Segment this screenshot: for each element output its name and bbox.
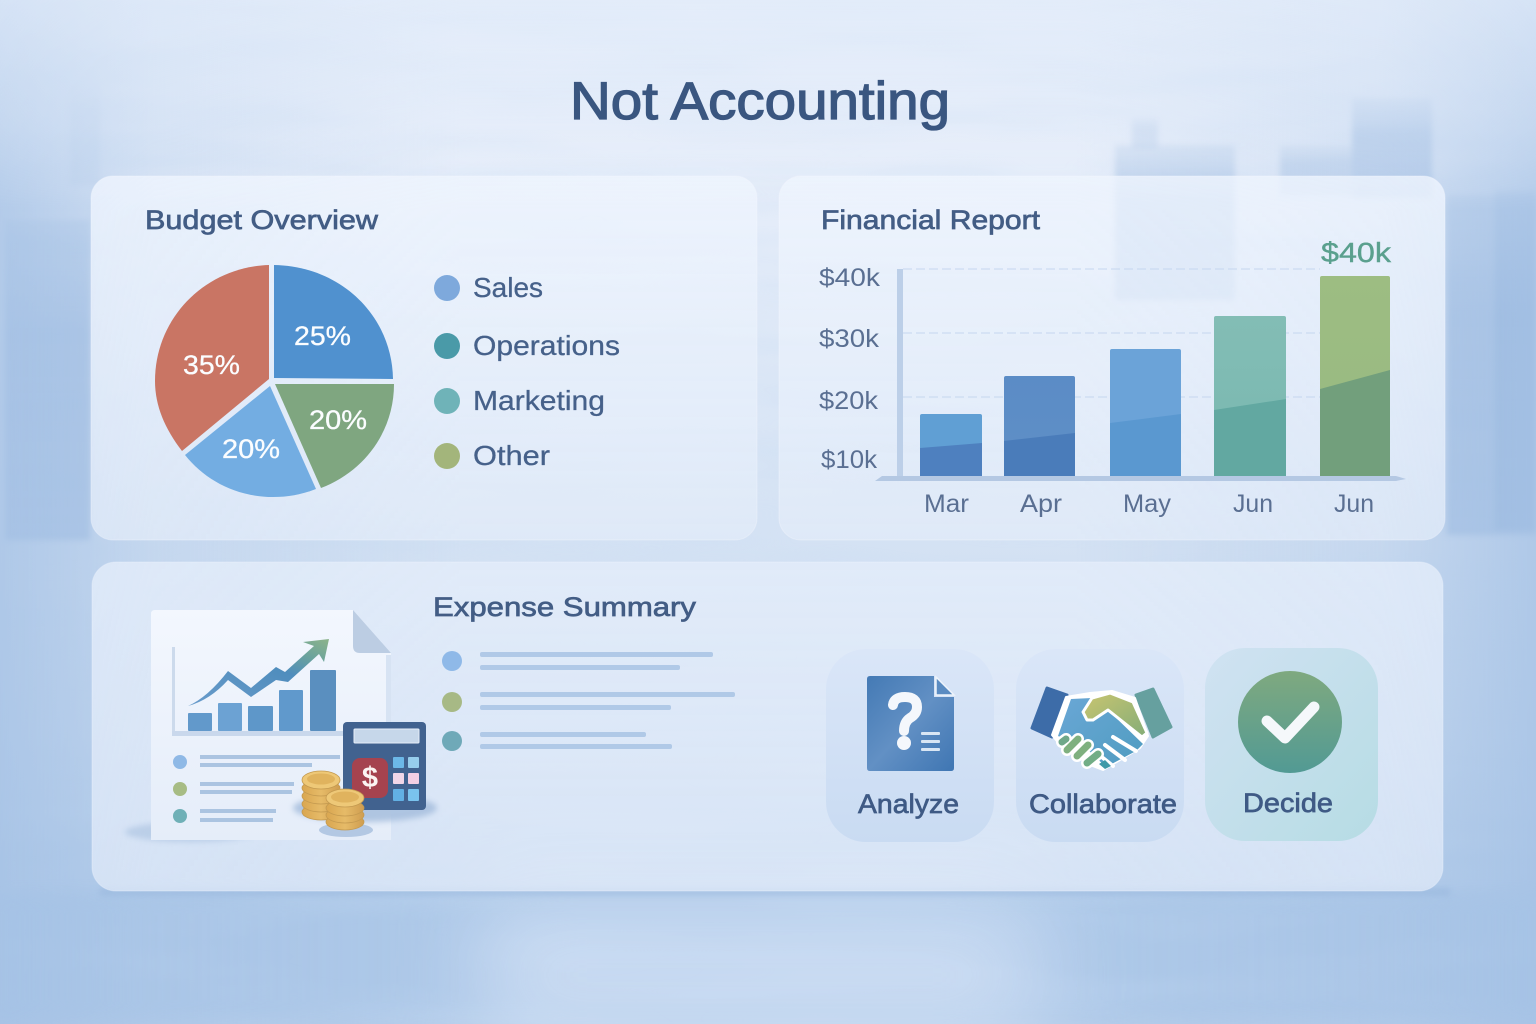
legend [434, 272, 620, 471]
mini bar chart [172, 639, 391, 736]
panel: expense summary [92, 562, 1443, 891]
panel: budget overview [91, 176, 757, 540]
expense list [442, 651, 735, 751]
icon: question document [867, 676, 954, 771]
bar chart [819, 237, 1406, 518]
pie labels: 25% [294, 321, 351, 351]
heading: budget overview: Budget Overview [145, 205, 379, 235]
pie chart [155, 265, 394, 497]
legend: Sales [473, 272, 543, 303]
trend arrow [188, 639, 329, 706]
icon: check circle [1238, 671, 1342, 773]
tile: analyze [826, 649, 994, 842]
bar: Mar [920, 414, 982, 476]
x axis labels [924, 490, 1374, 518]
x axis labels: Apr [1020, 490, 1062, 518]
title: Not Accounting [570, 72, 950, 131]
pie labels: 20% [309, 405, 367, 435]
pie labels: 35% [183, 350, 240, 380]
heading: expense summary: Expense Summary [433, 592, 697, 622]
calculator: $ [362, 762, 378, 794]
slice: 25 percent [274, 265, 393, 379]
tile: collaborate [1016, 649, 1184, 842]
y axis labels: $10k [821, 446, 878, 474]
label: collaborate: Collaborate [1029, 789, 1177, 819]
label: analyze: Analyze [858, 789, 959, 819]
y axis labels: $20k [819, 387, 879, 415]
pie labels [183, 321, 367, 464]
report list [173, 755, 340, 823]
panel: financial report [779, 176, 1445, 540]
y axis labels [819, 264, 881, 474]
x axis labels: May [1123, 490, 1172, 518]
bar: Apr [1004, 376, 1075, 476]
heading: financial report: Financial Report [821, 205, 1041, 235]
slice: 20 percent light blue [185, 386, 316, 497]
legend: Marketing [473, 385, 605, 416]
coins [302, 771, 373, 837]
bar: Jun peak [1320, 276, 1390, 476]
icon: handshake [1032, 688, 1171, 770]
tile: decide [1205, 648, 1378, 841]
legend: Other [473, 440, 550, 471]
pie labels: 20% [222, 434, 280, 464]
y axis labels: $40k [819, 264, 881, 292]
peak value label: $40k [1321, 237, 1392, 268]
slice: 35 percent [155, 265, 269, 451]
x axis labels: Jun [1233, 490, 1273, 518]
legend: Operations [473, 330, 620, 361]
x axis labels: Mar [924, 490, 969, 518]
y axis labels: $30k [819, 325, 880, 353]
illustration: report with calculator and coins [125, 610, 437, 842]
calculator [343, 722, 426, 810]
report sheet [151, 610, 391, 840]
slice: 20 percent green [275, 384, 394, 488]
x axis labels: Jun [1334, 490, 1374, 518]
label: decide: Decide [1243, 788, 1333, 818]
bar: May [1110, 349, 1181, 476]
bar: Jun [1214, 316, 1286, 476]
